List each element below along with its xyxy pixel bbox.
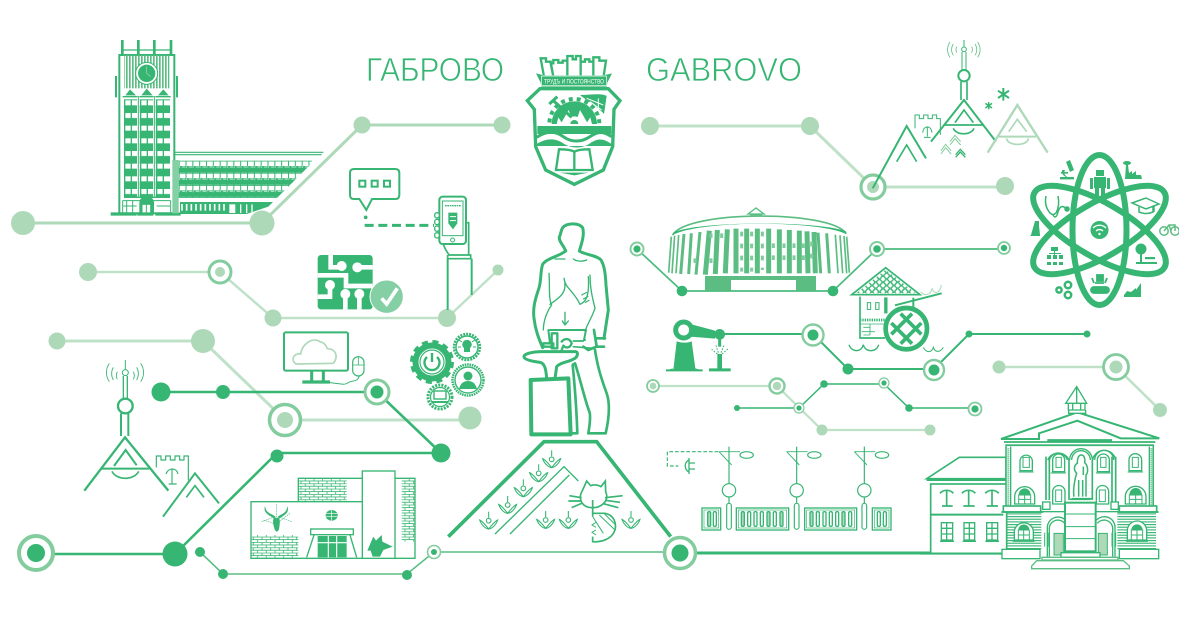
title: Bulgarian: ГАБРОВО bbox=[366, 52, 504, 89]
icon: city coat of arms bbox=[527, 56, 620, 184]
trouser leg bbox=[571, 350, 609, 433]
power gear bbox=[412, 342, 452, 382]
icon: bicycle bbox=[1160, 225, 1179, 235]
laptop gear bbox=[428, 385, 452, 409]
icon: monitor with cloud and mouse bbox=[284, 332, 364, 384]
book bbox=[556, 149, 593, 170]
plant 1 bbox=[480, 512, 498, 529]
light mountain bbox=[988, 105, 1048, 153]
building: library with reliefs bbox=[251, 471, 415, 558]
lamps and fence bbox=[667, 447, 891, 530]
side wing bbox=[927, 457, 1006, 479]
entrance bbox=[123, 201, 171, 213]
spires bbox=[122, 40, 171, 55]
icon: cogs bbox=[1056, 282, 1071, 298]
tower body bbox=[119, 55, 174, 213]
circuit: left second light line bbox=[79, 261, 504, 327]
fence bbox=[702, 508, 891, 530]
icon: growth chart bbox=[1124, 283, 1141, 297]
title: Latin: GABROVO bbox=[646, 52, 802, 89]
horse rider relief bbox=[367, 535, 393, 557]
lantern relief bbox=[326, 510, 338, 521]
side windows bbox=[1020, 454, 1142, 504]
lamp 2 bbox=[787, 447, 821, 529]
banner bbox=[536, 73, 612, 87]
plant 6 bbox=[537, 511, 555, 528]
circuit: light crossing line bbox=[647, 378, 936, 436]
hammer and tongs bbox=[543, 333, 572, 350]
icon: gears cluster bbox=[412, 334, 484, 409]
arched windows middle bbox=[1015, 486, 1146, 504]
icon: circuit board with check bbox=[318, 255, 403, 313]
building: museum bbox=[920, 387, 1159, 569]
icon: org chart bbox=[1047, 247, 1063, 265]
anvil bbox=[524, 352, 577, 378]
tower bbox=[962, 40, 965, 47]
plant 5 bbox=[543, 450, 561, 468]
steps bbox=[1061, 553, 1100, 557]
plant 4 bbox=[530, 464, 548, 482]
icon: flask bbox=[1030, 221, 1040, 236]
river bbox=[537, 126, 611, 134]
icon: factory bbox=[1123, 161, 1142, 179]
circuit: dark crossing line bbox=[734, 378, 982, 416]
icon: antenna tower left with castle and mountain bbox=[84, 360, 219, 517]
person gear bbox=[452, 364, 484, 396]
chevrons bbox=[941, 135, 961, 154]
icon: tree and bench bbox=[1136, 244, 1157, 264]
insect relief bbox=[265, 507, 288, 532]
icon: wifi centre bbox=[1090, 221, 1108, 239]
building: watermill bbox=[849, 267, 943, 352]
low wing bbox=[173, 152, 323, 155]
stars bbox=[998, 88, 1009, 101]
dashed cable and plug bbox=[667, 452, 718, 466]
plant 7 bbox=[559, 511, 577, 528]
icon: antenna tower right with castle and mountains bbox=[873, 40, 1048, 188]
cupola bbox=[1066, 387, 1087, 413]
icon: city coat of arms: ТРУДЪ И ПОСТОЯНСТВО bbox=[544, 78, 604, 85]
mountain bbox=[873, 126, 926, 188]
block bbox=[531, 378, 571, 434]
castle bbox=[156, 456, 188, 481]
sculptures bbox=[125, 89, 169, 95]
circuit: left dark line with ring bbox=[19, 380, 450, 570]
mountain bbox=[163, 473, 219, 517]
plinth bbox=[1065, 503, 1096, 551]
icon: atom with technology icons bbox=[1021, 155, 1179, 305]
circuit: left third light line bbox=[48, 329, 482, 436]
lamp 1 bbox=[719, 447, 753, 529]
circuit: top-right light line bbox=[641, 117, 1014, 199]
clock bbox=[136, 62, 158, 84]
pediment bbox=[1001, 412, 1159, 439]
crown towers bbox=[541, 56, 606, 78]
hammer and wing bbox=[549, 97, 572, 117]
main block bbox=[1006, 445, 1153, 512]
icon: microscope bbox=[1060, 160, 1074, 179]
cornice bbox=[1003, 506, 1041, 512]
icon: speech bubble bbox=[350, 169, 434, 225]
icon: robot bbox=[1090, 170, 1110, 197]
statue bbox=[1072, 455, 1092, 499]
circuit: robot arm line bbox=[720, 324, 1090, 380]
icon: graduation cap bbox=[1132, 198, 1159, 214]
icon: hand holding phone bbox=[435, 197, 472, 310]
arches upper bbox=[1048, 449, 1116, 460]
circuit: bottom thick line to museum bbox=[664, 538, 935, 568]
circuit: dome line bbox=[630, 242, 1010, 296]
icon: robot arm with sprinkler bbox=[666, 322, 731, 371]
building: domed hall bbox=[669, 208, 849, 291]
atom orbits bbox=[1021, 155, 1178, 305]
gear bbox=[547, 97, 602, 124]
circuit: bottom thin line bbox=[195, 546, 680, 580]
plant 2 bbox=[499, 496, 517, 513]
plant 3 bbox=[514, 479, 532, 497]
door bbox=[311, 529, 353, 535]
pedestal with plants and cat bbox=[448, 442, 671, 542]
bulb gear bbox=[454, 334, 480, 360]
cat bbox=[568, 481, 623, 542]
shield bbox=[527, 89, 620, 184]
windows bbox=[124, 99, 170, 198]
circuit: top-left light line bbox=[11, 116, 510, 236]
statue: blacksmith with anvil bbox=[524, 224, 609, 434]
circuit: right light line bbox=[992, 354, 1167, 417]
plant 8 bbox=[622, 511, 640, 528]
lamp 3 bbox=[854, 447, 889, 529]
icon: conveyor robot bbox=[1091, 275, 1109, 293]
ground floor bbox=[1014, 521, 1147, 540]
castle bbox=[915, 115, 940, 135]
doors bbox=[1047, 517, 1115, 557]
icon: stethoscope bbox=[1046, 196, 1069, 217]
building: tower block with clock bbox=[111, 40, 323, 215]
